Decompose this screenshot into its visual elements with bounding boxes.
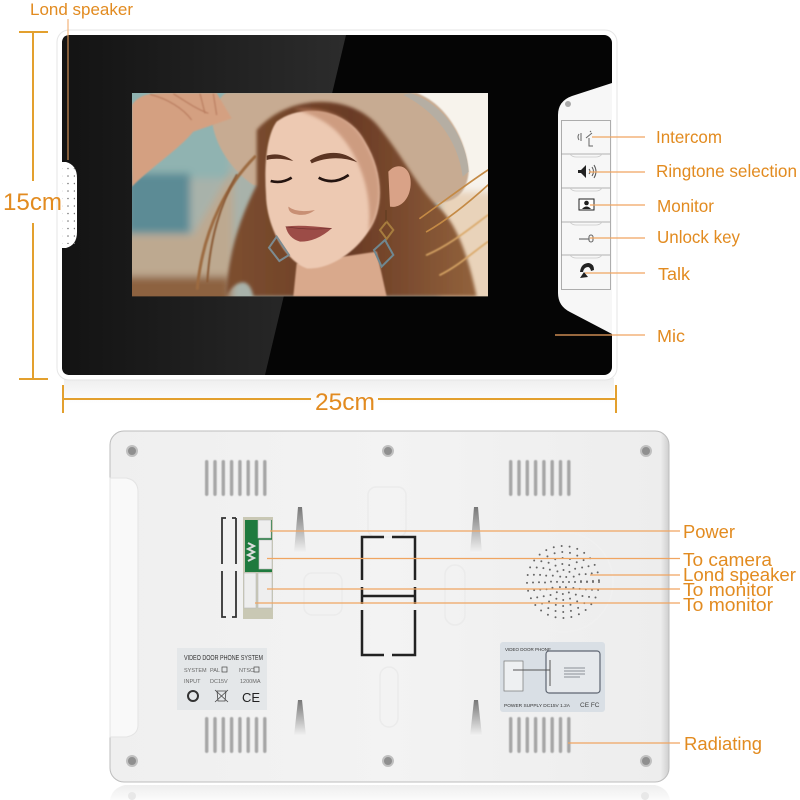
icon: recycle bin (215, 690, 228, 702)
face (265, 108, 411, 268)
sticker specs: DC15V (210, 679, 228, 685)
height dimension (3, 32, 62, 379)
hair strands (197, 157, 488, 288)
green circuit board (245, 520, 272, 572)
glass gloss (62, 35, 346, 375)
label: to monitor 1: To monitor (683, 580, 773, 600)
icon: speaker (578, 165, 596, 178)
side ridge (110, 478, 138, 737)
nose (288, 207, 315, 215)
label: talk: Talk (658, 264, 690, 284)
rear monitor (110, 431, 669, 782)
label: ringtone selection: Ringtone selection (656, 161, 797, 181)
left speaker tab (58, 162, 77, 248)
monitor detail (564, 668, 585, 677)
neck (293, 252, 387, 296)
vents (205, 460, 570, 753)
certification marks: CE FC (580, 702, 600, 709)
sticker title: VIDEO DOOR PHONE SYSTEM (184, 655, 263, 662)
second device reflection (110, 785, 670, 800)
embossed shapes (304, 487, 613, 727)
label: lond speaker rear: Lond speaker (683, 565, 796, 585)
icon: intercom (578, 131, 593, 146)
screws (127, 446, 651, 766)
callout lines rear (255, 531, 680, 743)
sticker specs: 1200MA (240, 679, 261, 685)
label: to camera: To camera (683, 550, 773, 570)
wiring sticker (500, 642, 605, 712)
eyelids (271, 175, 349, 182)
indicator light (565, 101, 571, 107)
label: to monitor 2: To monitor (683, 595, 773, 615)
hair (197, 102, 488, 296)
center brackets (362, 537, 415, 655)
label: unlock key: Unlock key (657, 227, 740, 247)
ce mark: CE (242, 690, 260, 705)
spec sticker (177, 648, 267, 710)
sticker specs: NTSC (239, 668, 254, 674)
sticker specs: SYSTEM (184, 668, 207, 674)
button panel (558, 83, 612, 334)
side brackets (222, 518, 236, 617)
sticker specs: PAL (210, 668, 220, 674)
eyebrows (267, 154, 293, 161)
sticker specs (184, 667, 261, 685)
connector block (243, 517, 273, 619)
label: intercom: Intercom (656, 127, 722, 147)
screen photo (132, 93, 488, 296)
icon: certification mark (188, 691, 198, 701)
connectors (244, 520, 272, 608)
black glass panel (62, 35, 612, 375)
icon: monitor person (579, 199, 594, 210)
mounting wedges (294, 507, 482, 736)
monitor outline (546, 651, 600, 693)
callout lines front (68, 19, 645, 335)
label: radiating: Radiating (684, 734, 762, 754)
sticker specs: INPUT (184, 679, 201, 685)
photo background (132, 93, 488, 296)
monitor reflection (64, 378, 614, 404)
white frame (57, 30, 617, 380)
power text: POWER SUPPLY DC15V 1.2A (504, 703, 571, 709)
earrings (269, 210, 393, 267)
hat (213, 93, 469, 203)
label: 25cm: 25cm (315, 389, 375, 416)
button frame (561, 120, 610, 290)
wiring (513, 660, 550, 686)
lips (286, 226, 332, 242)
label: power: Power (683, 522, 735, 542)
width dimension (63, 385, 616, 416)
label: 15cm: 15cm (3, 189, 62, 216)
icon: handset (580, 263, 594, 278)
wiring title: VIDEO DOOR PHONE (505, 647, 551, 652)
icon: key (579, 235, 593, 242)
rear housing (110, 431, 669, 782)
label: monitor: Monitor (657, 196, 714, 216)
front monitor (57, 30, 617, 404)
hand (132, 93, 232, 187)
label: lond speaker top: Lond speaker (30, 1, 134, 19)
speaker grille (527, 546, 599, 618)
ghost screws (128, 792, 649, 800)
ear (388, 166, 411, 207)
label: mic: Mic (657, 326, 685, 346)
camera outline (504, 661, 523, 691)
